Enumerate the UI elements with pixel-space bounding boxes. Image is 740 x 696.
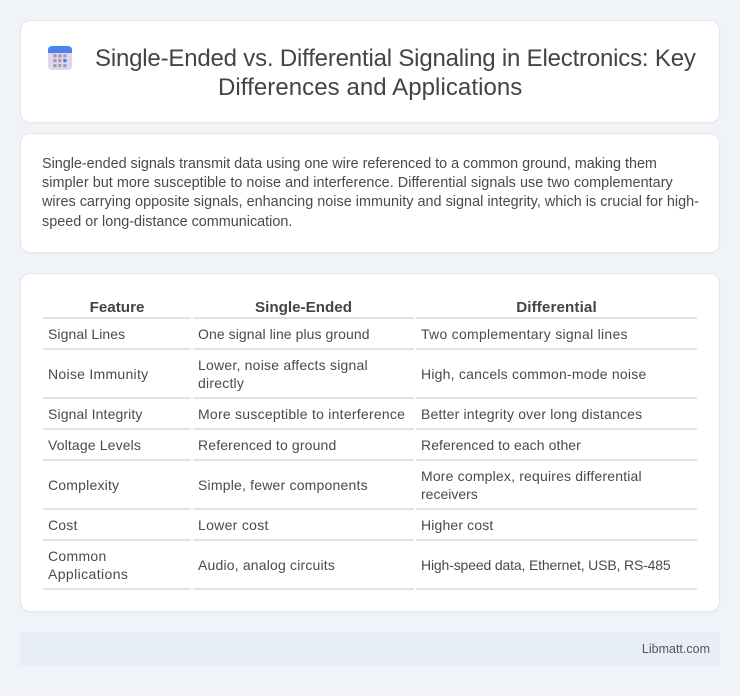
- intro text: wires carrying opposite signals, enhancing noise immunity and signal integrity, which is crucial for high-: [42, 194, 699, 210]
- title: Single-Ended vs. Differential Signaling in Electronics: Key: [95, 45, 696, 72]
- intro text: speed or long-distance communication.: [42, 214, 292, 230]
- row: Common Applications: [48, 548, 128, 582]
- row: Complexity: Complexity: [48, 477, 119, 493]
- comparison table: High, cancels common-mode noise: [421, 366, 646, 382]
- intro panel: [20, 133, 720, 253]
- title: [95, 45, 696, 101]
- row: Voltage Levels: Voltage Levels: [48, 437, 141, 453]
- row: Cost: Cost: [48, 517, 78, 533]
- footer text: Libmatt.com: [642, 642, 710, 656]
- comparison table: Higher cost: [421, 517, 493, 533]
- row: Common Applications: Applications: [48, 566, 128, 582]
- comparison table: More complex, requires differential: [421, 468, 642, 484]
- comparison table: Lower cost: [198, 517, 269, 533]
- comparison table: Referenced to ground: [198, 437, 336, 453]
- header panel: [20, 20, 720, 123]
- comparison table: Referenced to each other: [421, 437, 581, 453]
- intro text: Single-ended signals transmit data using one wire referenced to a common ground, making them: [42, 156, 657, 172]
- row: Noise Immunity: Noise Immunity: [48, 366, 148, 382]
- comparison table: Better integrity over long distances: [421, 406, 642, 422]
- intro text: [42, 156, 699, 230]
- header: Single-Ended: Single-Ended: [255, 299, 352, 316]
- comparison table: directly: [198, 375, 244, 391]
- comparison table: More susceptible to interference: [198, 406, 405, 422]
- table panel: [20, 273, 720, 612]
- comparison table: Lower, noise affects signal: [198, 357, 368, 373]
- title: Differences and Applications: [218, 74, 522, 101]
- header: Differential: Differential: [516, 299, 597, 316]
- row: Common Applications: Common: [48, 548, 107, 564]
- header: Feature: Feature: [90, 299, 144, 316]
- comparison table: One signal line plus ground: [198, 326, 370, 342]
- comparison table: High-speed data, Ethernet, USB, RS-485: [421, 557, 671, 573]
- comparison table: Audio, analog circuits: [198, 557, 335, 573]
- comparison table: Simple, fewer components: [198, 477, 368, 493]
- row: Signal Integrity: Signal Integrity: [48, 406, 143, 422]
- comparison table: Two complementary signal lines: [421, 326, 628, 342]
- row: Signal Lines: Signal Lines: [48, 326, 125, 342]
- comparison table: receivers: [421, 486, 478, 502]
- intro text: simpler but more susceptible to noise and interference. Differential signals use two complementary: [42, 175, 673, 191]
- icon: calendar grid: [48, 46, 72, 70]
- footer: [20, 632, 720, 666]
